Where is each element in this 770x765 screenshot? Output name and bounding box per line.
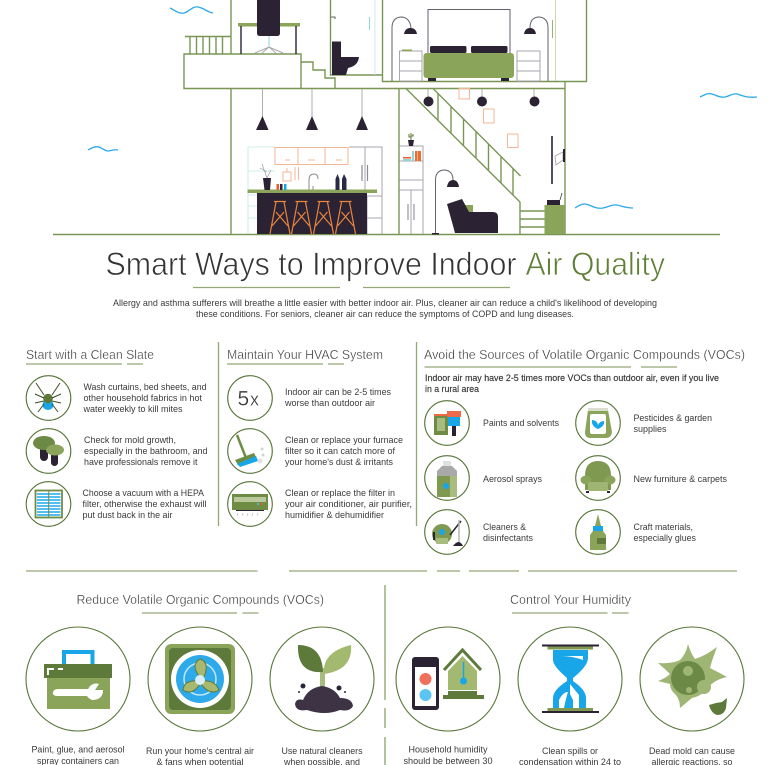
intro text: these conditions. For seniors, cleaner air can reduce the symptoms of COPD and lung diseases. xyxy=(196,309,574,319)
text: craft xyxy=(634,522,696,543)
icon: vacuum cleaner xyxy=(425,510,469,554)
text: indoor air: Indoor air can be 2-5 times xyxy=(285,387,391,397)
text: containers xyxy=(32,744,124,765)
bedroom: bed, lamps, nightstands xyxy=(392,0,556,81)
text: furnace filter: Clean or replace your furnace xyxy=(285,435,403,445)
text: air conditioner filter: humidifier & dehumidifier xyxy=(285,510,384,520)
title: Air Quality xyxy=(526,246,665,282)
icon: aerosol xyxy=(425,456,469,500)
bathroom: toilet and shower xyxy=(331,0,375,75)
office desk and chair xyxy=(238,0,300,54)
text: choose a vacuum xyxy=(82,488,206,520)
text: dead mold: Dead mold can cause xyxy=(649,746,735,756)
text: household humidity: Household humidity xyxy=(408,744,488,754)
panel: maintain HVAC xyxy=(227,347,412,526)
text: furnace filter: filter so it can catch more of xyxy=(285,446,395,456)
text: clean spills: Clean spills or xyxy=(542,746,598,756)
text: clean spills xyxy=(519,746,621,765)
text: natural cleaners xyxy=(282,746,363,765)
icon: toolbox xyxy=(26,627,130,731)
section divider xyxy=(26,570,737,572)
text: indoor air: worse than outdoor air xyxy=(284,398,375,408)
icon: pesticide bag xyxy=(576,401,620,445)
heading: reduce VOCs: Reduce Volatile Organic Compounds (VOCs) xyxy=(76,593,324,607)
heading: humidity: Control Your Humidity xyxy=(510,593,632,607)
icon: HEPA filter xyxy=(26,482,71,526)
text: choose a vacuum: filter, otherwise the exhaust will xyxy=(82,499,206,509)
text: aerosol: Aerosol sprays xyxy=(483,474,542,484)
subheading: in a rural area xyxy=(425,384,480,394)
heading: clean slate: Start with a Clean Slate xyxy=(26,347,154,362)
staircase xyxy=(406,88,565,234)
text: paints: Paints and solvents xyxy=(483,418,559,428)
icon: phone and house xyxy=(396,627,500,731)
text: check for mold: have professionals remove it xyxy=(84,457,198,467)
waves: blue air squiggles xyxy=(88,7,757,208)
vertical divider: bottom panels xyxy=(384,585,386,765)
text: pesticides xyxy=(634,413,712,434)
wall TV xyxy=(552,136,565,184)
kitchen xyxy=(248,147,382,234)
text: choose a vacuum: Choose a vacuum with a HEPA xyxy=(82,488,205,498)
icon: plant in soil xyxy=(270,627,374,731)
text: choose a vacuum: put dust back in the air xyxy=(82,510,172,520)
structure: walls and floors xyxy=(53,0,720,234)
text: check for mold: especially in the bathroom, and xyxy=(84,446,208,456)
text: check for mold: Check for mold growth, xyxy=(84,435,176,445)
heading: humidity xyxy=(510,593,632,613)
text: pesticides: supplies xyxy=(634,424,667,434)
floor lamp xyxy=(432,170,459,234)
icon: armchair xyxy=(576,456,620,500)
bookshelf with plant and books xyxy=(400,133,423,234)
panel: control humidity xyxy=(396,593,744,765)
text: central air: Run your home's central air xyxy=(146,746,254,756)
text: household humidity xyxy=(404,744,492,765)
icon: air conditioner xyxy=(228,482,272,526)
text: indoor air xyxy=(284,387,391,408)
text: wash curtains: Wash curtains, bed sheets, and xyxy=(84,382,206,392)
icon: fan xyxy=(148,627,252,731)
bar stools xyxy=(270,202,356,234)
text: furnace filter: your home's dust & irritants xyxy=(285,457,393,467)
pendant lights xyxy=(256,89,540,130)
heading: HVAC: Maintain Your HVAC System xyxy=(227,347,383,362)
text: cleaners xyxy=(483,522,533,543)
text: cleaners: Cleaners & xyxy=(483,522,526,532)
subheading xyxy=(425,373,719,394)
text: furniture: New furniture & carpets xyxy=(634,474,727,484)
text: pesticides: Pesticides & garden xyxy=(634,413,712,423)
icon: broom xyxy=(228,429,272,473)
text: dead mold xyxy=(649,746,735,765)
icon: mushrooms xyxy=(26,429,71,473)
text: wash curtains: other household fabrics in hot xyxy=(84,393,202,403)
icon: 5x: 5 xyxy=(238,388,249,410)
text: wash curtains xyxy=(83,382,206,414)
armchair xyxy=(447,199,498,233)
icon: hourglass xyxy=(518,627,622,731)
title xyxy=(106,246,665,288)
icon: 5x: x xyxy=(250,390,259,410)
illustration: cutaway house xyxy=(53,0,757,234)
picture frames xyxy=(459,88,518,148)
text: cleaners: disinfectants xyxy=(483,533,533,543)
subheading: Indoor air may have 2-5 times more VOCs than outdoor air, even if you live xyxy=(425,373,719,383)
icon: glue bottle xyxy=(576,510,620,554)
text: containers: Paint, glue, and aerosol xyxy=(32,744,124,754)
icon: dead mold xyxy=(640,627,744,731)
text: craft: Craft materials, xyxy=(634,522,693,532)
icon: tick xyxy=(26,376,71,420)
panel: reduce VOCs xyxy=(26,593,374,765)
text: wash curtains: water weekly to kill mites xyxy=(83,404,183,414)
panel: start with a clean slate xyxy=(26,347,208,526)
text: furnace filter xyxy=(285,435,403,467)
text: craft: especially glues xyxy=(634,533,696,543)
heading: avoid VOCs: Avoid the Sources of Volatile Organic Compounds (VOCs) xyxy=(424,347,745,362)
intro text xyxy=(113,298,657,319)
text: central air xyxy=(146,746,254,765)
icon: 5x xyxy=(228,376,272,420)
icon: paint xyxy=(425,401,469,445)
text: air conditioner filter: your air conditioner, air purifier, xyxy=(285,499,412,509)
column dividers xyxy=(218,342,416,526)
text: air conditioner filter: Clean or replace the filter in xyxy=(285,488,395,498)
panel: avoid sources of VOCs xyxy=(424,347,745,554)
intro text: Allergy and asthma sufferers will breathe a little easier with better indoor air. Plus, cleaner air can reduce a child's likelihood of developing xyxy=(113,298,657,308)
text: natural cleaners: Use natural cleaners xyxy=(282,746,363,756)
text: air conditioner filter xyxy=(285,488,412,520)
text: check for mold xyxy=(84,435,208,467)
title: Smart Ways to Improve Indoor xyxy=(106,246,517,282)
